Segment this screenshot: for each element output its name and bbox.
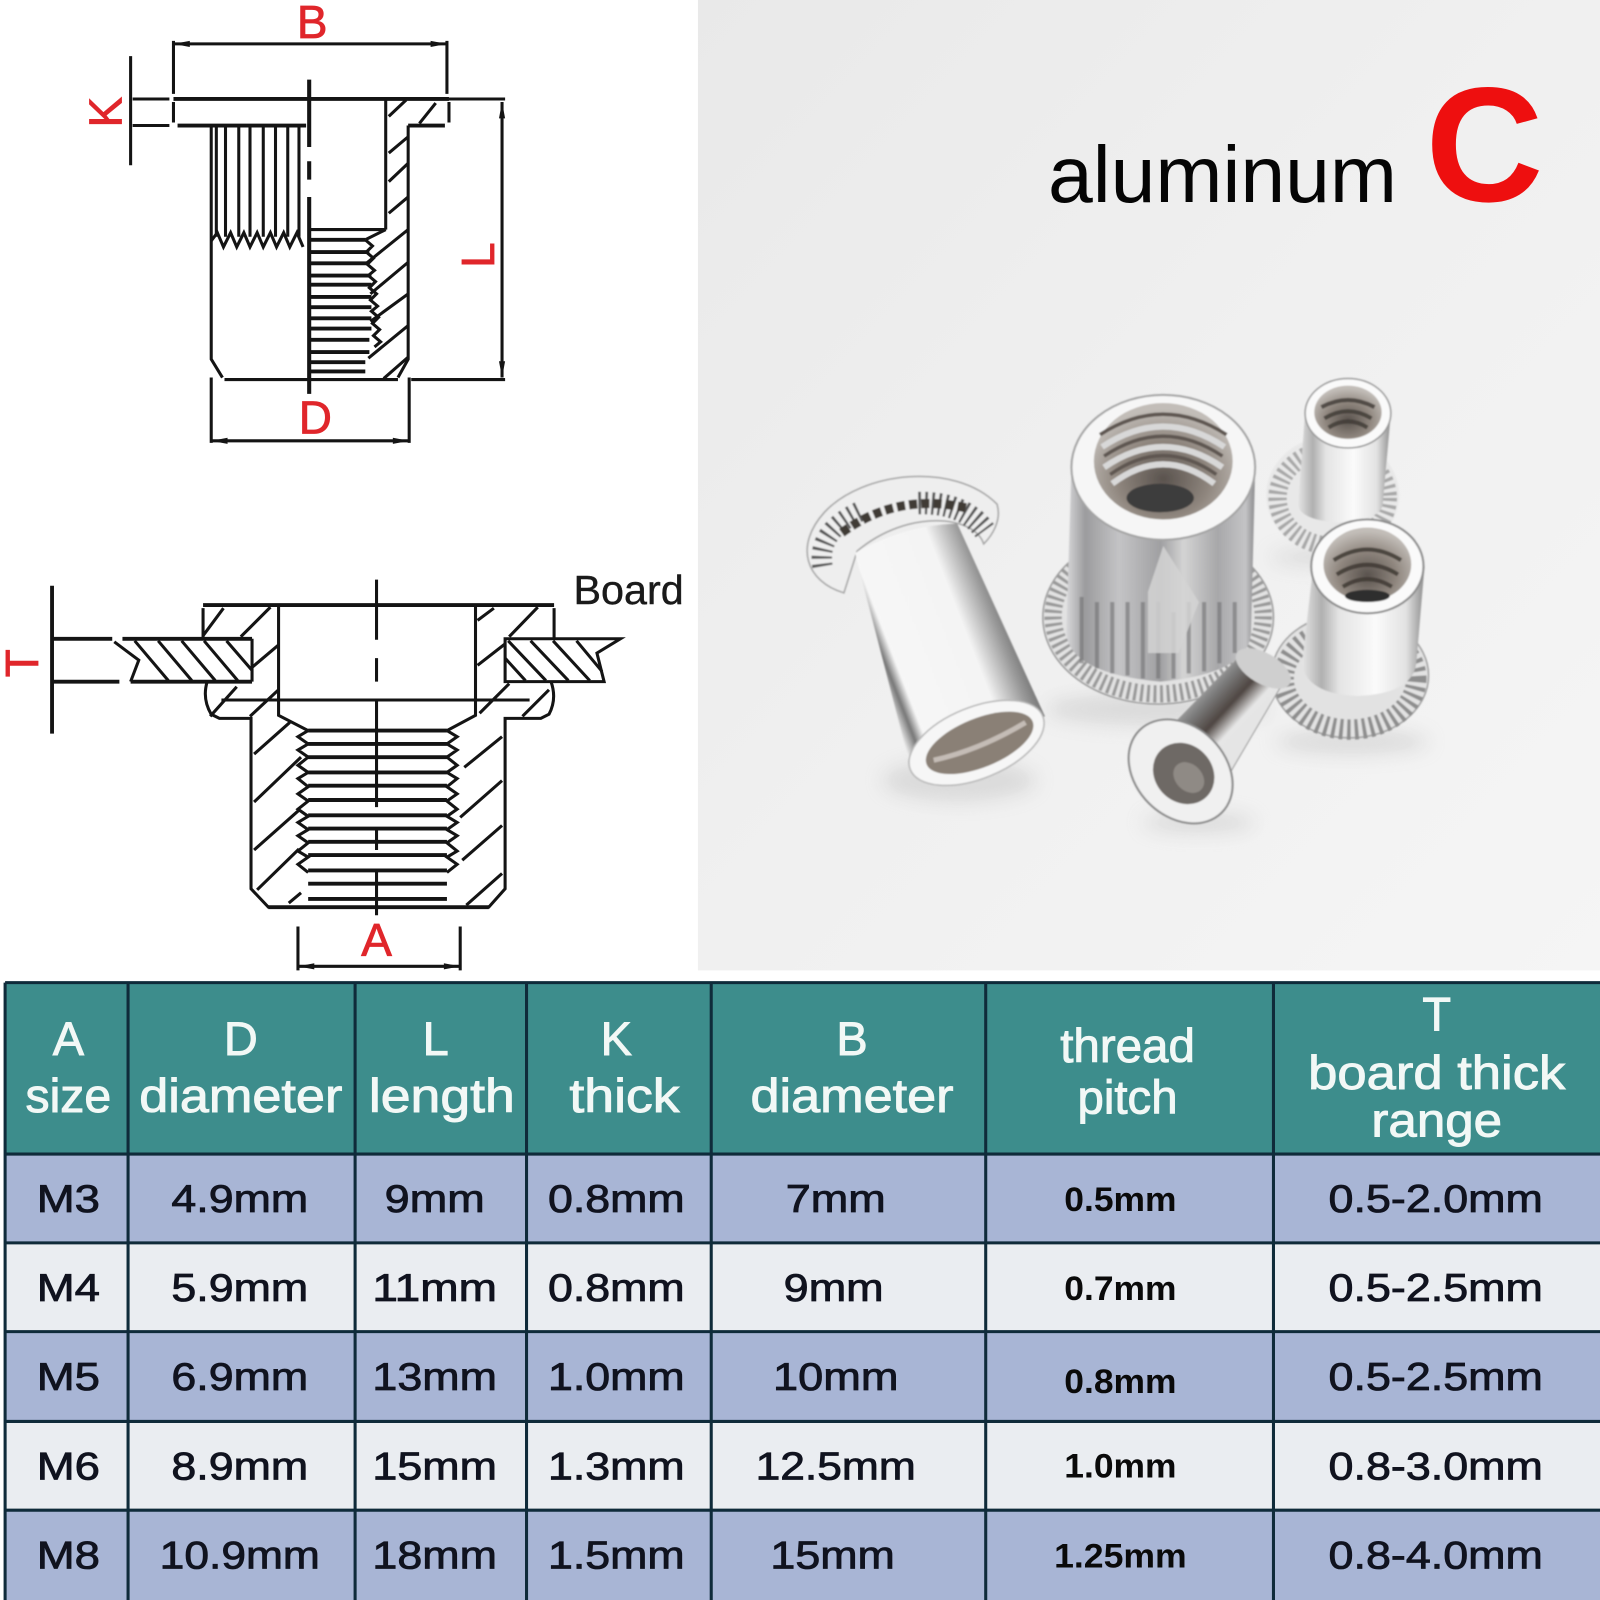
header labels: L (423, 1013, 449, 1065)
row M8: 18mm (372, 1534, 497, 1577)
header labels: board thick (1308, 1047, 1566, 1099)
row M6: 8.9mm (171, 1446, 308, 1489)
dimension L: L (452, 242, 504, 268)
header labels: thread (1060, 1020, 1195, 1072)
nut: large centre (1043, 395, 1273, 704)
diagram: installed section with board, T and A dimensions (0, 567, 684, 970)
table: dimensions by size (5, 983, 1600, 1600)
rivet nut outline (173, 80, 449, 394)
dimension T (0, 586, 252, 734)
header labels: diameter (751, 1070, 954, 1122)
row M8: 1.5mm (548, 1534, 685, 1577)
row M5: 10mm (773, 1356, 898, 1399)
photo: five aluminium rivet nuts (807, 379, 1429, 844)
heading: aluminum C: C (1426, 53, 1543, 236)
row M8: 1.25mm (1054, 1537, 1187, 1575)
label: Board: Board (573, 567, 684, 613)
row M5: 1.0mm (548, 1356, 685, 1399)
row M8: 15mm (770, 1534, 895, 1577)
nut: medium right (1271, 519, 1429, 738)
header labels: pitch (1078, 1071, 1178, 1123)
row M3: 0.8mm (548, 1178, 685, 1221)
table grid (5, 983, 1600, 1600)
row M5: M5 (37, 1356, 100, 1399)
header labels (26, 989, 1566, 1147)
header labels: T (1422, 989, 1451, 1041)
row M3 (37, 1178, 1543, 1221)
row M3: 4.9mm (171, 1178, 308, 1221)
row M5: 0.8mm (1064, 1363, 1177, 1401)
nut shadows (883, 549, 1429, 833)
dimension A (298, 914, 460, 970)
row M8: 10.9mm (160, 1534, 320, 1577)
dimension D (211, 378, 409, 444)
row M5: 6.9mm (171, 1356, 308, 1399)
dimension K: K (79, 97, 131, 128)
header labels: K (601, 1013, 632, 1065)
row M8: 0.8-4.0mm (1329, 1534, 1543, 1577)
row M3: M3 (37, 1178, 100, 1221)
row M6: 12.5mm (756, 1446, 916, 1489)
row M6: 15mm (372, 1446, 497, 1489)
nut: lying left (807, 476, 1056, 803)
table header row (5, 983, 1600, 1154)
row M4: M4 (37, 1267, 100, 1310)
row M6: 1.0mm (1064, 1448, 1177, 1486)
header labels: B (836, 1013, 868, 1065)
row M8: M8 (37, 1534, 100, 1577)
rivet nut section (203, 580, 554, 915)
row M3: 7mm (786, 1178, 886, 1221)
header labels: diameter (139, 1070, 342, 1122)
dimension B (173, 0, 447, 94)
header labels: length (369, 1070, 515, 1122)
row M6: M6 (37, 1446, 100, 1489)
dimension D: D (299, 392, 332, 444)
row M6 (37, 1446, 1543, 1489)
header labels: D (224, 1013, 258, 1065)
row M4: 0.7mm (1064, 1270, 1177, 1308)
row M6: 0.8-3.0mm (1329, 1446, 1543, 1489)
row M8 (37, 1534, 1543, 1577)
row M5: 13mm (372, 1356, 497, 1399)
row M3: 9mm (385, 1178, 485, 1221)
panel: product photo background (698, 0, 1600, 970)
row M4: 9mm (784, 1267, 884, 1310)
row M5: 0.5-2.5mm (1329, 1356, 1543, 1399)
board section hatching (114, 639, 620, 682)
row M4: 5.9mm (171, 1267, 308, 1310)
row M4 (37, 1267, 1543, 1310)
row M6: 1.3mm (548, 1446, 685, 1489)
header labels: A (53, 1013, 85, 1065)
nut: small back right (1266, 379, 1399, 554)
header labels: thick (569, 1070, 680, 1122)
header labels: size (26, 1070, 111, 1122)
dimension A: A (361, 914, 392, 966)
heading: aluminum C: aluminum (1048, 130, 1397, 219)
diagram: side section with B K L D dimensions (79, 0, 505, 444)
row M4: 11mm (372, 1267, 497, 1310)
nut: small front (1108, 640, 1297, 844)
dimension L (411, 99, 505, 380)
header labels: range (1371, 1095, 1502, 1147)
row M5 (37, 1356, 1543, 1401)
row backgrounds (5, 1154, 1600, 1600)
dimension K (79, 56, 169, 165)
row M3: 0.5-2.0mm (1329, 1178, 1543, 1221)
heading: aluminum C (1048, 53, 1543, 236)
row M4: 0.5-2.5mm (1329, 1267, 1543, 1310)
row M4: 0.8mm (548, 1267, 685, 1310)
row M3: 0.5mm (1064, 1181, 1177, 1219)
